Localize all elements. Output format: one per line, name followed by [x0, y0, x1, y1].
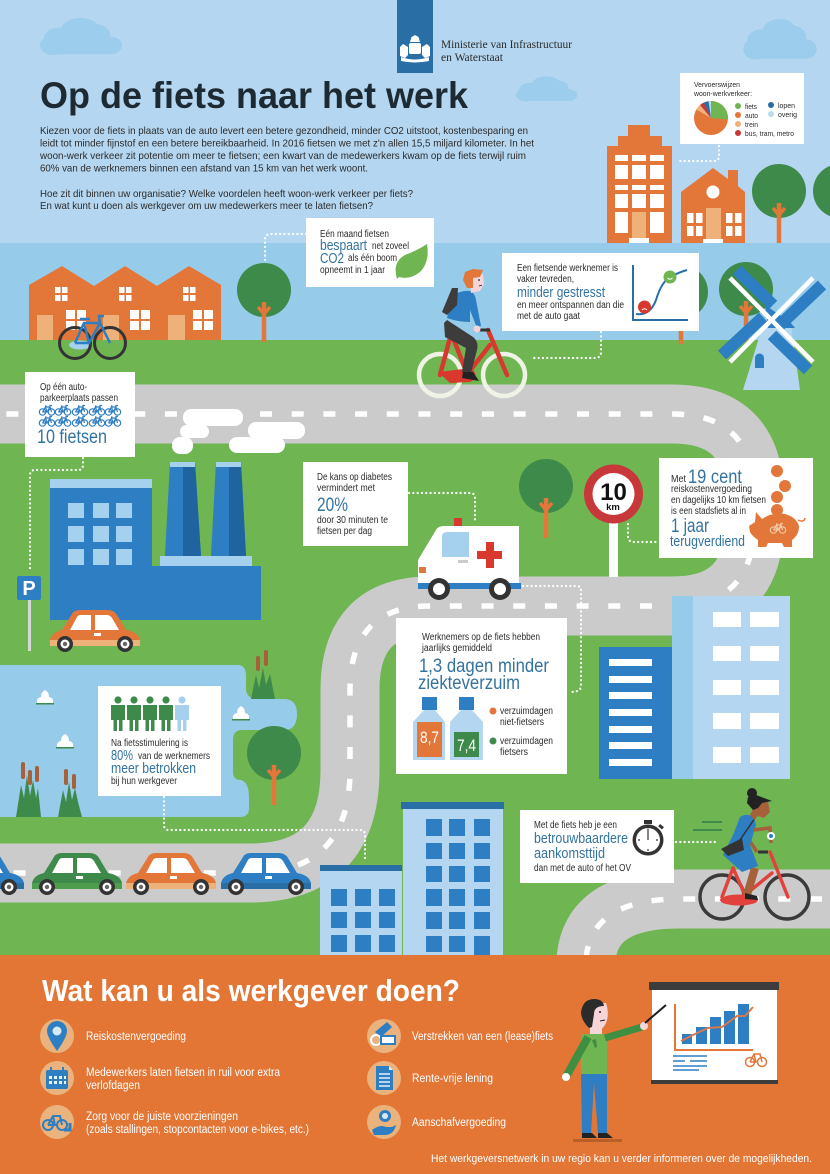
bottle: cyclists: 7,4 — [457, 736, 476, 755]
background: green land — [0, 340, 830, 955]
water lily 3 — [56, 734, 74, 748]
intro text: Kiezen voor de fiets in plaats van de auto levert een betere gezondheid, minder CO2 uitstoot, kostenbesparing en — [40, 125, 528, 137]
title: Op de fiets naar het werk — [40, 75, 468, 116]
right blue building — [599, 647, 672, 779]
pie chart — [694, 101, 728, 135]
bottle: cyclists — [450, 697, 483, 760]
card: reliable arrival: betrouwbaardere — [534, 830, 628, 847]
presenter figure — [562, 999, 666, 1142]
card: diabetes: vermindert met — [317, 483, 375, 494]
card: CO2 savings: Eén maand fietsen — [320, 229, 389, 240]
card: 19 cent: 19 cent — [688, 467, 743, 488]
pie legend — [735, 101, 797, 138]
item: lease bike: Verstrekken van een (lease)fiets — [412, 1031, 553, 1043]
icon: cloud middle — [516, 76, 577, 102]
item: extra leave — [40, 1061, 281, 1095]
card: 19 cent — [659, 458, 813, 558]
card: diabetes — [303, 462, 408, 546]
factory — [50, 462, 261, 620]
speed sign 10 km: 10 — [600, 479, 627, 506]
tree at pond — [247, 726, 301, 805]
card: parking spot: Op één auto- — [40, 382, 87, 393]
card: CO2 savings: net zoveel — [372, 241, 409, 252]
ministry name — [441, 37, 572, 64]
item: facilities: (zoals stallingen, stopcontacten voor e-bikes, etc.) — [86, 1124, 309, 1136]
background: horizon water band — [0, 243, 830, 340]
card: parking spot — [25, 372, 135, 457]
card: reliable arrival: aankomsttijd — [534, 845, 605, 862]
tree left — [237, 263, 291, 342]
card: engagement — [98, 686, 221, 796]
item: purchase allowance: Aanschafvergoeding — [412, 1117, 506, 1129]
item: extra leave: verlofdagen — [86, 1080, 140, 1092]
pie legend: trein — [745, 120, 758, 129]
water lily 1 — [36, 690, 54, 704]
icon: map pin — [47, 1021, 67, 1051]
traffic queue cars — [0, 853, 311, 895]
bottom centre building — [320, 802, 504, 957]
card: sick days: 1,3 dagen minder — [419, 656, 550, 677]
card: less stress: minder gestresst — [517, 284, 606, 301]
right tall building — [672, 596, 790, 779]
card: 19 cent: is een stadsfiets al in — [671, 506, 746, 517]
card: sick days — [396, 618, 567, 774]
intro text: Hoe zit dit binnen uw organisatie? Welke voordelen heeft woon-werk verkeer per fiets? — [40, 188, 413, 200]
item: travel allowance: Reiskostenvergoeding — [86, 1031, 186, 1043]
footer note: Het werkgeversnetwerk in uw regio kan u verder informeren over de mogelijkheden. — [431, 1153, 812, 1165]
cyclist woman — [693, 788, 809, 919]
item: loan — [367, 1061, 493, 1095]
tree behind card — [654, 265, 708, 344]
ambulance — [418, 518, 521, 600]
card: less stress — [502, 253, 699, 331]
icon: calendar — [46, 1067, 68, 1089]
card: CO2 savings — [306, 218, 434, 287]
item: facilities: Zorg voor de juiste voorzieningen — [86, 1111, 238, 1123]
panel: what can employers do — [0, 955, 830, 1174]
road markings — [0, 414, 830, 960]
card: 19 cent: terugverdiend — [670, 533, 745, 550]
item: travel allowance — [40, 1019, 186, 1053]
intro text — [39, 125, 534, 212]
icon row: ten bikes — [39, 406, 121, 426]
background: sky — [0, 0, 830, 243]
intro text: woon-werk verkeer zit potentie om meer te fietsen; een kwart van de medewerkers kwam op de fiets terwijl ruim — [39, 150, 526, 162]
card: less stress: en meer ontspannen dan die — [517, 300, 624, 311]
pie legend: bus, tram, metro — [745, 129, 794, 138]
card: reliable arrival: Met de fiets heb je een — [534, 820, 617, 831]
parking sign: P — [22, 578, 36, 600]
pie legend: lopen — [778, 101, 795, 110]
icon: document — [376, 1066, 393, 1090]
card: transport modes with pie chart — [680, 73, 804, 144]
legend: niet-fietsers — [500, 717, 544, 728]
card: sick days: ziekteverzuim — [418, 673, 520, 694]
detached house — [681, 168, 745, 243]
card: less stress: vaker tevreden, — [517, 274, 574, 285]
card: diabetes: 20% — [317, 495, 348, 516]
speed sign 10 km — [584, 464, 643, 577]
card: CO2 savings: opneemt in 1 jaar — [320, 265, 386, 276]
item: facilities — [40, 1105, 309, 1139]
intro text: 60% van de werknemers binnen een afstand van 15 km van het werk woont. — [40, 162, 368, 174]
pie legend: auto — [745, 111, 758, 120]
card: sick days: Werknemers op de fiets hebben — [422, 632, 540, 643]
roads — [0, 414, 830, 960]
card: engagement: meer betrokken — [111, 760, 196, 777]
tree right 1 — [752, 164, 806, 243]
intro text: En wat kunt u doen als werkgever om uw medewerkers meer te laten fietsen? — [40, 200, 373, 212]
item: lease bike — [367, 1019, 553, 1053]
card: less stress: Een fietsende werknemer is — [517, 263, 618, 274]
bottle: non-cyclists: 8,7 — [420, 728, 439, 747]
intro text: leidt tot minder fijnstof en een betere bereikbaarheid. In 2016 fietsen we met z'n allen 15,5 miljard kilometer. In het — [40, 138, 534, 150]
tree behind windmill — [719, 262, 773, 341]
pie legend: overig — [778, 110, 797, 119]
pond — [0, 665, 297, 817]
card: diabetes: fietsen per dag — [317, 526, 372, 537]
card: reliable arrival — [520, 810, 674, 883]
smoke — [172, 409, 305, 454]
card: diabetes: De kans op diabetes — [317, 472, 392, 483]
card: engagement: 80% — [111, 747, 133, 764]
card: transport modes with pie chart: Vervoerswijzen — [694, 80, 740, 89]
card: diabetes: door 30 minuten te — [317, 515, 388, 526]
card: parking spot: 10 fietsen — [37, 427, 107, 448]
card: CO2 savings: bespaart — [320, 237, 368, 254]
speed sign 10 km: km — [606, 502, 620, 513]
reeds group 1 — [16, 762, 41, 817]
legend: verzuimdagen — [500, 706, 553, 717]
item: purchase allowance — [367, 1105, 506, 1139]
legend: fietsers — [500, 747, 528, 758]
ministry name: Ministerie van Infrastructuur — [441, 37, 572, 51]
card: transport modes with pie chart: woon-werkverkeer: — [693, 89, 752, 98]
icon: hand with coin — [372, 1110, 396, 1135]
reeds group 3 — [251, 650, 275, 699]
card: sick days: jaarlijks gemiddeld — [421, 643, 492, 654]
cyclist man — [419, 269, 525, 396]
ministry name: en Waterstaat — [441, 50, 504, 64]
card: 19 cent: reiskostenvergoeding — [671, 484, 752, 495]
stress chart — [633, 265, 688, 320]
icon: key — [371, 1022, 395, 1045]
icon: cloud left — [40, 18, 122, 55]
legend: verzuimdagen — [500, 736, 553, 747]
icon: crest — [400, 35, 430, 62]
card: 19 cent: Met — [671, 474, 686, 485]
card: engagement: bij hun werkgever — [111, 776, 178, 787]
presentation screen with chart — [649, 982, 779, 1084]
card: 19 cent: en dagelijks 10 km fietsen — [671, 495, 766, 506]
card: CO2 savings: als één boom — [348, 253, 397, 264]
bottle: non-cyclists — [413, 697, 445, 760]
card: parking spot: parkeerplaats passen — [40, 393, 118, 404]
item: loan: Rente-vrije lening — [412, 1073, 493, 1085]
reeds group 2 — [58, 769, 82, 817]
icon: bike at stand — [43, 1116, 70, 1130]
canal house — [607, 125, 672, 243]
tree mid — [519, 459, 573, 538]
icon: coins and piggy bank — [749, 465, 805, 547]
card: less stress: met de auto gaat — [517, 311, 580, 322]
icon row: five people — [111, 696, 189, 731]
legend — [490, 706, 553, 758]
windmill — [722, 270, 822, 390]
icon: parked bicycle — [60, 316, 126, 358]
orange car at factory — [50, 610, 140, 652]
icon: stopwatch — [632, 820, 664, 856]
item: extra leave: Medewerkers laten fietsen in ruil voor extra — [86, 1067, 281, 1079]
parking sign — [17, 576, 41, 651]
card: CO2 savings: CO2 — [320, 250, 344, 267]
card: reliable arrival: dan met de auto of het OV — [534, 863, 631, 874]
tree right 2 — [813, 164, 830, 243]
water lily 2 — [232, 706, 250, 720]
header band with crest — [397, 0, 433, 73]
heading: Wat kan u als werkgever doen? — [42, 973, 460, 1008]
card: engagement: van de werknemers — [138, 751, 210, 762]
icon: leaf — [396, 244, 428, 279]
row houses — [29, 266, 221, 340]
icon: cloud right — [743, 19, 817, 60]
card: 19 cent: 1 jaar — [671, 516, 710, 537]
pie legend: fiets — [745, 102, 757, 111]
card: engagement: Na fietsstimulering is — [111, 738, 188, 749]
